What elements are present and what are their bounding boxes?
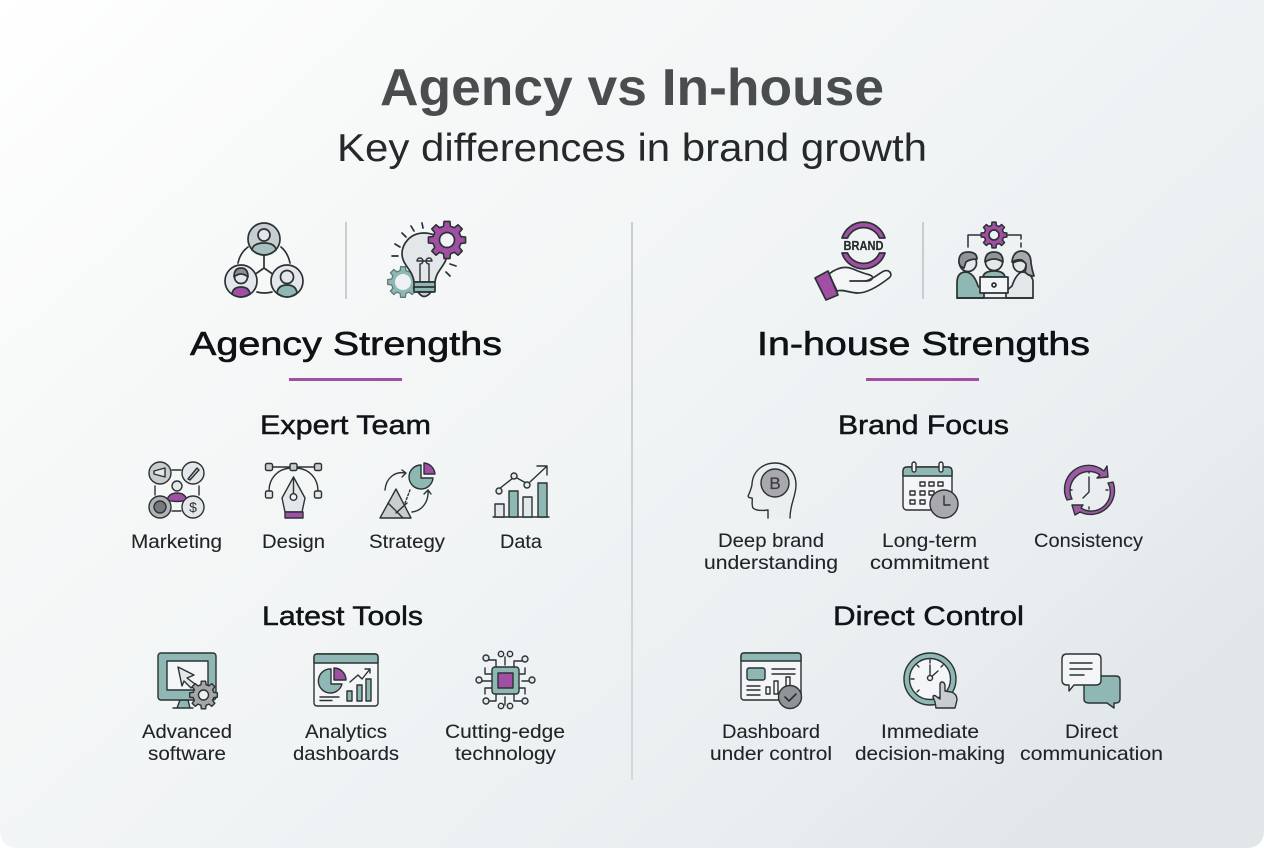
label: analytics dashboards: Analytics [305, 721, 387, 743]
heading: in-house strengths: In-house Strengths [757, 325, 1090, 362]
heading: brand focus: Brand Focus [838, 410, 1009, 440]
icon: in-house team [957, 222, 1034, 298]
icon: idea bulb with gears [388, 221, 466, 297]
label: cutting-edge technology: technology [455, 743, 556, 765]
label: advanced software [142, 721, 232, 765]
divider: in-house icons [922, 222, 924, 299]
heading: expert team: Expert Team [260, 410, 431, 440]
label: long-term commitment [870, 530, 990, 574]
label: long-term commitment: Long-term [882, 530, 977, 552]
icon: brand in hand: BRAND [844, 239, 884, 253]
label: cutting-edge technology: Cutting-edge [445, 721, 565, 743]
label: direct communication: Direct [1065, 721, 1119, 743]
icon: cutting-edge technology [476, 651, 535, 709]
icon: brand in hand [815, 222, 891, 300]
icon: consistency [1064, 465, 1115, 515]
subtitle: Key differences in brand growth [337, 127, 927, 170]
underline [866, 378, 979, 381]
icon: dashboard under control [741, 653, 802, 708]
label: dashboard under control: Dashboard [722, 721, 820, 743]
label: data: Data [500, 531, 542, 553]
panel: in-house strengths [704, 222, 1163, 765]
label: dashboard under control: under control [710, 743, 832, 765]
icon: deep brand understanding: B [769, 474, 781, 493]
heading: latest tools: Latest Tools [262, 601, 423, 631]
label: consistency: Consistency [1034, 530, 1143, 552]
label: marketing: Marketing [131, 531, 222, 553]
icon: immediate decision-making [904, 653, 957, 708]
label: cutting-edge technology [445, 721, 565, 765]
center divider [631, 222, 633, 780]
divider: agency icons [345, 222, 347, 299]
label: long-term commitment: commitment [870, 552, 990, 574]
label: deep brand understanding [704, 530, 838, 574]
icon: advanced software [158, 653, 217, 709]
icon: long-term commitment [903, 462, 958, 518]
icon: marketing: $ [189, 499, 197, 515]
label: immediate decision-making: Immediate [881, 721, 979, 743]
icon: strategy [380, 463, 435, 518]
panel: agency strengths [131, 221, 565, 765]
icon: data chart [493, 466, 549, 517]
label: analytics dashboards [293, 721, 399, 765]
label: design: Design [262, 531, 325, 553]
icon: deep brand understanding [748, 463, 796, 518]
icon: analytics dashboard [314, 654, 378, 706]
icon: design pen [266, 464, 322, 518]
icon: marketing [149, 462, 204, 518]
label: advanced software: Advanced [142, 721, 232, 743]
label: strategy: Strategy [369, 531, 445, 553]
heading: agency strengths: Agency Strengths [190, 325, 502, 362]
label: direct communication: communication [1020, 743, 1163, 765]
icon: direct communication [1062, 654, 1120, 708]
label: analytics dashboards: dashboards [293, 743, 399, 765]
underline [289, 378, 402, 381]
label: immediate decision-making [855, 721, 1005, 765]
label: deep brand understanding: understanding [704, 552, 838, 574]
label: immediate decision-making: decision-making [855, 743, 1005, 765]
label: deep brand understanding: Deep brand [718, 530, 824, 552]
icon: expert network [225, 223, 303, 297]
heading: direct control: Direct Control [833, 601, 1024, 631]
label: dashboard under control [710, 721, 832, 765]
title: Agency vs In-house [380, 59, 884, 117]
label: advanced software: software [148, 743, 226, 765]
label: direct communication [1020, 721, 1163, 765]
